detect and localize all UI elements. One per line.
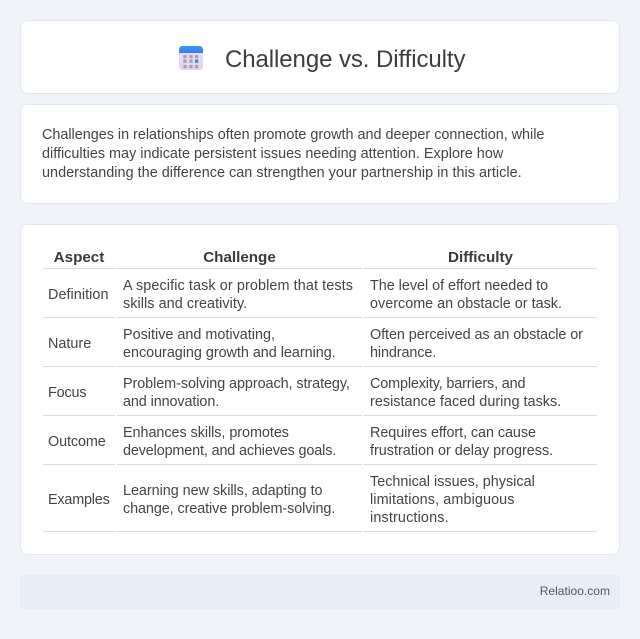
panel: introduction xyxy=(20,104,620,204)
row: examples xyxy=(48,474,535,526)
row: focus: Problem-solving approach, strategy, xyxy=(123,376,350,392)
row: examples: limitations, ambiguous xyxy=(370,492,515,508)
row: definition: A specific task or problem that tests xyxy=(123,278,353,294)
table header xyxy=(54,249,513,266)
row: nature: Positive and motivating, xyxy=(123,327,275,343)
title: Challenge vs. Difficulty xyxy=(225,46,465,73)
panel: title header xyxy=(20,20,620,94)
row: focus: Complexity, barriers, and xyxy=(370,376,525,392)
row: examples: Examples xyxy=(48,492,110,508)
row: definition xyxy=(48,278,562,312)
row: definition: Definition xyxy=(48,287,108,303)
table header: Aspect xyxy=(54,249,104,266)
panel: comparison table xyxy=(20,224,620,555)
row: focus: resistance faced during tasks. xyxy=(370,394,561,410)
intro text: understanding the difference can strengthen your partnership in this article. xyxy=(42,165,522,181)
row: definition: overcome an obstacle or task. xyxy=(370,296,562,312)
row: examples: Technical issues, physical xyxy=(370,474,535,490)
row: focus: and innovation. xyxy=(123,394,219,410)
row: definition: The level of effort needed to xyxy=(370,278,548,294)
intro text xyxy=(42,127,544,181)
row: focus xyxy=(48,376,561,410)
footer bar xyxy=(20,575,620,609)
row: examples: change, creative problem-solving. xyxy=(123,501,335,517)
icon: calendar xyxy=(179,46,203,70)
row: examples: Learning new skills, adapting to xyxy=(123,483,323,499)
intro text: difficulties may indicate persistent issues needing attention. Explore how xyxy=(42,146,503,162)
row: nature: encouraging growth and learning. xyxy=(123,345,336,361)
table header: Challenge xyxy=(203,249,276,266)
row: outcome: development, and achieves goals. xyxy=(123,443,336,459)
row: nature: Often perceived as an obstacle or xyxy=(370,327,583,343)
row: outcome xyxy=(48,425,553,459)
row: outcome: frustration or delay progress. xyxy=(370,443,553,459)
row: outcome: Enhances skills, promotes xyxy=(123,425,289,441)
intro text: Challenges in relationships often promote growth and deeper connection, while xyxy=(42,127,544,143)
row: definition: skills and creativity. xyxy=(123,296,247,312)
row: nature: hindrance. xyxy=(370,345,436,361)
row: nature: Nature xyxy=(48,336,91,352)
row: outcome: Outcome xyxy=(48,434,106,450)
row: nature xyxy=(48,327,583,361)
table header: Difficulty xyxy=(448,249,513,266)
row: focus: Focus xyxy=(48,385,86,401)
row: outcome: Requires effort, can cause xyxy=(370,425,536,441)
footer credit: Relatioo.com xyxy=(540,584,610,598)
row: examples: instructions. xyxy=(370,510,449,526)
